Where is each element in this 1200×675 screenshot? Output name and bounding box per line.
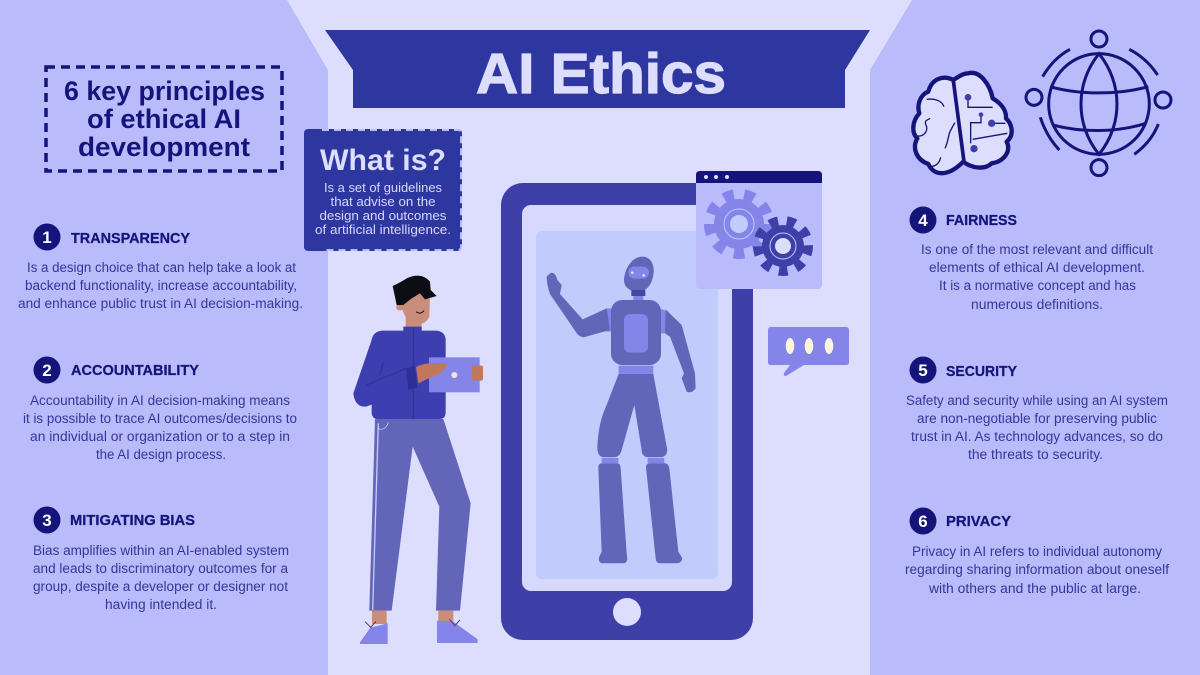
panel: what is: What is?: [320, 144, 446, 177]
principle 6: privacy: Privacy in AI refers to individual autonomy: [912, 544, 1162, 559]
principle 5: security: SECURITY: [946, 363, 1017, 380]
principle 5: security: the threats to security.: [968, 447, 1103, 462]
principle 1: transparency: backend functionality, increase accountability,: [25, 278, 297, 293]
principle 3: mitigating bias: [33, 506, 289, 612]
principle 1: transparency: 1: [42, 228, 52, 247]
principle 4: fairness: [910, 206, 1153, 312]
principle 4: fairness: Is one of the most relevant and difficult: [921, 242, 1153, 257]
principle 3: mitigating bias: Bias amplifies within an AI-enabled system: [33, 543, 289, 558]
panel: key principles heading: development: [78, 132, 250, 162]
principle 3: mitigating bias: MITIGATING BIAS: [70, 512, 195, 529]
principle 6: privacy: [905, 508, 1169, 596]
principle 1: transparency: and enhance public trust in AI decision-making.: [18, 296, 303, 311]
principle 6: privacy: PRIVACY: [946, 513, 1011, 530]
principle 2: accountability: ACCOUNTABILITY: [71, 362, 199, 379]
principle 4: fairness: It is a normative concept and has: [939, 278, 1136, 293]
principle 5: security: 5: [918, 361, 928, 380]
principle 2: accountability: an individual or organization or to a step in: [30, 429, 290, 444]
panel: key principles heading: [46, 67, 282, 171]
principle 6: privacy: 6: [918, 512, 928, 531]
panel: key principles heading: of ethical AI: [87, 104, 241, 134]
panel: key principles heading: 6 key principles: [64, 76, 265, 106]
principle 6: privacy: regarding sharing information about oneself: [905, 562, 1169, 577]
principle 3: mitigating bias: group, despite a developer or designer not: [33, 579, 288, 594]
principle 6: privacy: with others and the public at large.: [928, 581, 1141, 596]
panel: what is: of artificial intelligence.: [315, 223, 451, 237]
principle 3: mitigating bias: having intended it.: [105, 597, 217, 612]
panel: centre background: [287, 0, 912, 675]
principle 4: fairness: numerous definitions.: [971, 297, 1103, 312]
panel: what is: [304, 129, 462, 251]
principle 5: security: Safety and security while using an AI system: [906, 393, 1168, 408]
principle 4: fairness: 4: [918, 211, 928, 230]
principle 2: accountability: [23, 356, 297, 462]
icon: brain: [913, 73, 1012, 173]
speech bubble: [768, 327, 849, 376]
title banner: AI Ethics: [476, 42, 726, 106]
panel: what is: that advise on the: [330, 195, 436, 209]
phone illustration: [501, 183, 753, 640]
icon: globe: [1026, 31, 1171, 176]
principle 1: transparency: Is a design choice that can help take a look at: [27, 260, 296, 275]
robot: [547, 257, 696, 563]
principle 3: mitigating bias: 3: [42, 511, 52, 530]
principle 3: mitigating bias: and leads to discriminatory outcomes for a: [33, 561, 288, 576]
principle 4: fairness: FAIRNESS: [946, 212, 1017, 229]
principle 2: accountability: the AI design process.: [96, 447, 226, 462]
panel: what is: design and outcomes: [320, 209, 446, 223]
panel: what is: Is a set of guidelines: [324, 181, 442, 195]
title banner: [325, 30, 870, 108]
principle 5: security: [906, 356, 1168, 462]
principle 2: accountability: it is possible to trace AI outcomes/decisions to: [23, 411, 297, 426]
principle 5: security: are non-negotiable for preserving public: [917, 411, 1157, 426]
window with gears: [696, 171, 822, 289]
principle 1: transparency: TRANSPARENCY: [71, 230, 190, 247]
principle 1: transparency: [18, 224, 303, 311]
principle 5: security: trust in AI. As technology advances, so do: [911, 429, 1163, 444]
principle 2: accountability: Accountability in AI decision-making means: [30, 393, 290, 408]
principle 2: accountability: 2: [42, 361, 52, 380]
principle 4: fairness: elements of ethical AI development.: [929, 260, 1145, 275]
person with tablet: [353, 276, 483, 644]
